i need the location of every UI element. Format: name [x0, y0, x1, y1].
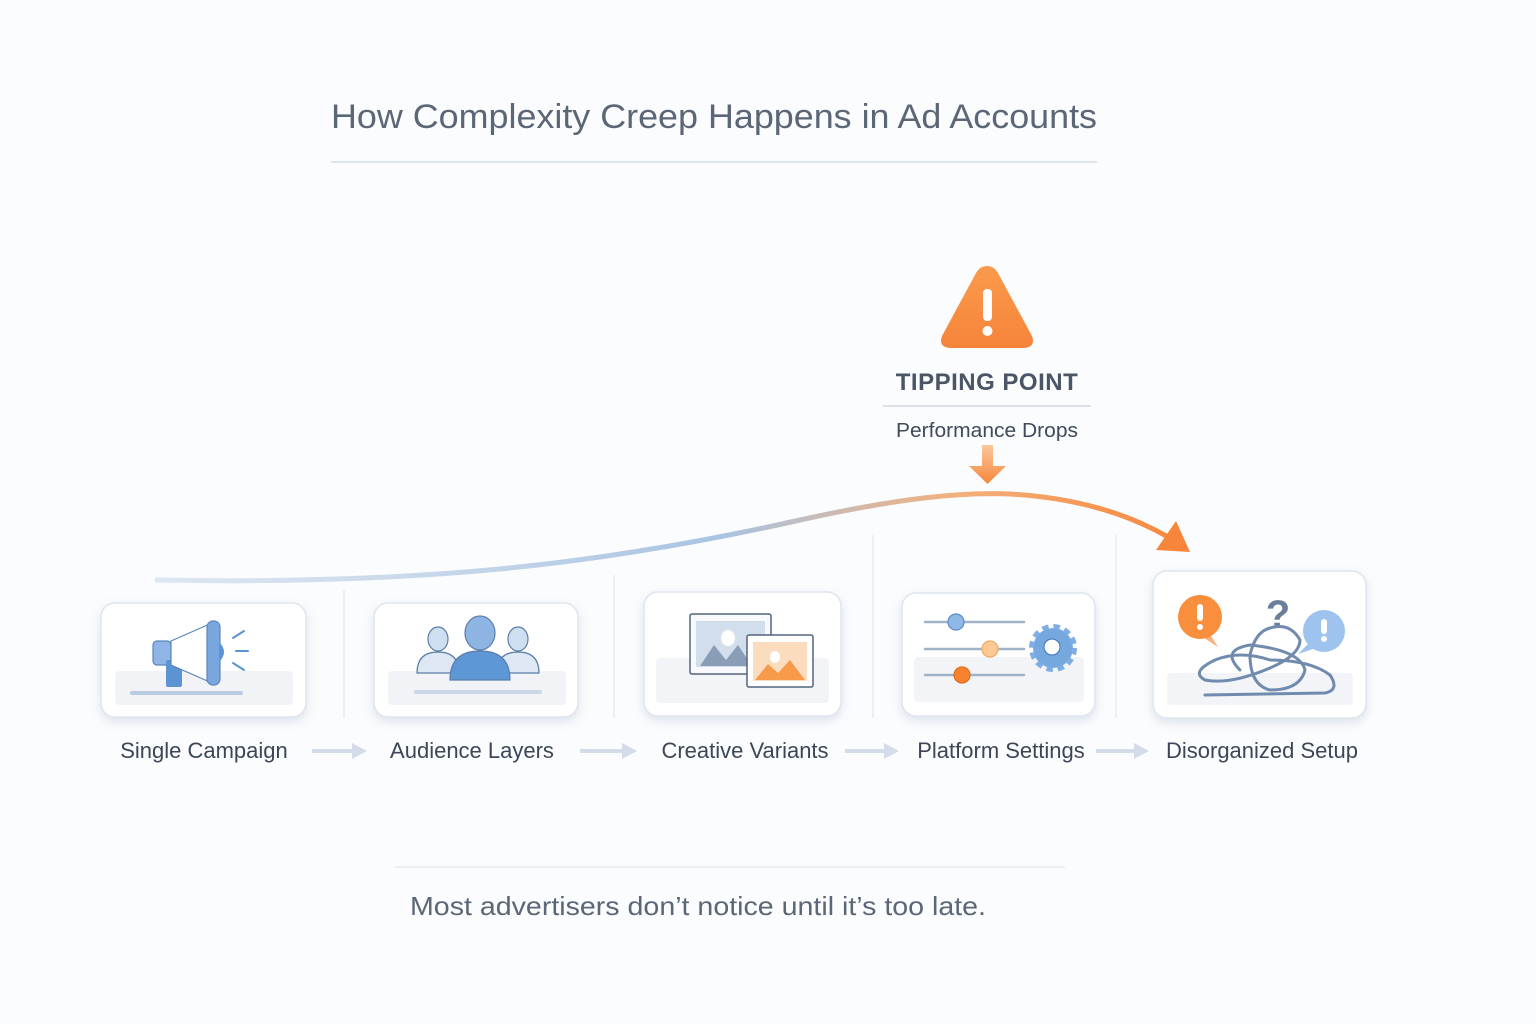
tipping point label: TIPPING POINT	[896, 369, 1078, 396]
icon: tangle with alerts: ?	[1266, 593, 1290, 637]
card 3: creative variants	[644, 592, 841, 716]
icon: tangle with alerts	[1178, 593, 1345, 695]
card 5: disorganized setup	[1153, 571, 1366, 718]
icon: megaphone	[130, 621, 248, 695]
dividers	[344, 535, 1116, 718]
step labels: Creative Variants	[661, 738, 829, 763]
tipping point label	[883, 369, 1091, 442]
step labels: Single Campaign	[120, 738, 288, 763]
step labels: Audience Layers	[390, 738, 554, 763]
growth curve arrow	[157, 494, 1190, 581]
card 4: platform settings	[902, 593, 1095, 716]
icon: warning triangle	[941, 266, 1033, 348]
tipping point label: Performance Drops	[896, 420, 1078, 442]
title: How Complexity Creep Happens in Ad Accounts	[331, 98, 1097, 136]
arrows between steps	[312, 743, 1149, 759]
icon: people	[417, 616, 539, 680]
arrow: down	[969, 445, 1006, 484]
card 1: single campaign	[101, 603, 306, 717]
step labels	[120, 738, 1358, 763]
footer note: Most advertisers don’t notice until it’s too late.	[410, 891, 986, 921]
card 2: audience layers	[374, 603, 578, 717]
icon: sliders and gear	[925, 614, 1073, 683]
step labels: Disorganized Setup	[1166, 738, 1358, 763]
icon: images	[690, 614, 813, 687]
step labels: Platform Settings	[917, 738, 1085, 763]
